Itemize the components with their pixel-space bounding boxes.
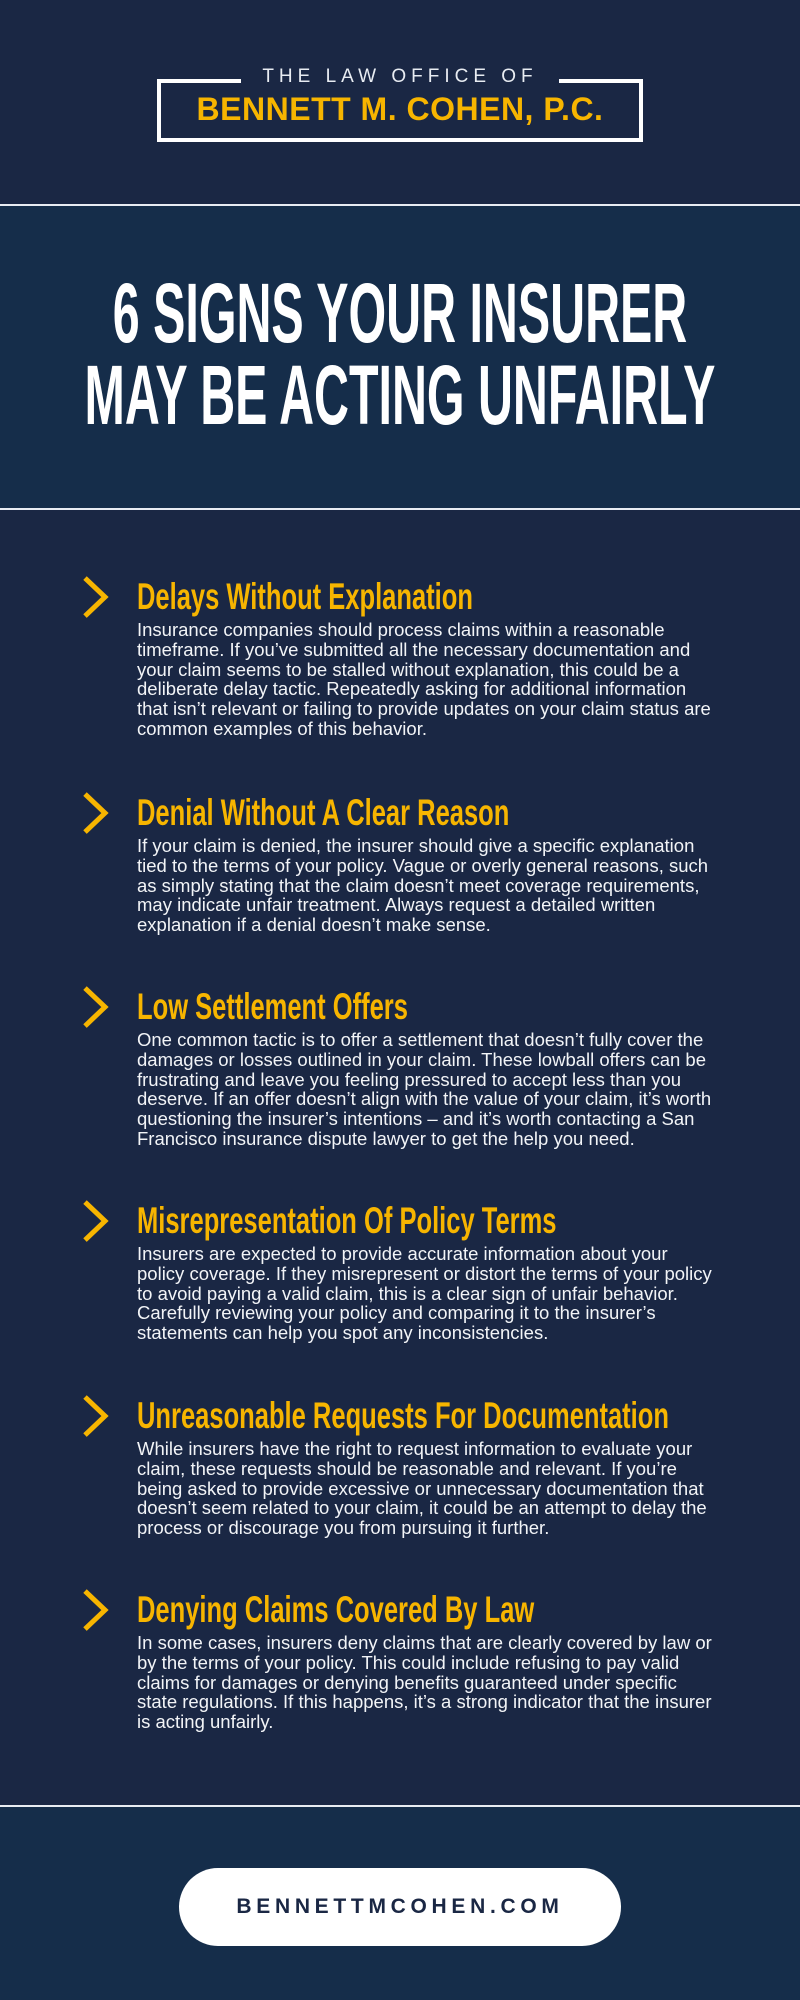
logo: BENNETT M. COHEN, P.C. [197, 91, 603, 127]
website button [179, 1868, 621, 1946]
text [137, 835, 708, 935]
text: damages or losses outlined in your claim. These lowball offers can be [137, 1049, 706, 1070]
text: Carefully reviewing your policy and comparing it to the insurer’s [137, 1302, 656, 1323]
icon: chevron [83, 986, 108, 1028]
item 6 [83, 1589, 712, 1732]
text: While insurers have the right to request information to evaluate your [137, 1438, 692, 1459]
item 5 [83, 1395, 707, 1538]
text: explanation if a denial doesn’t make sense. [137, 914, 491, 935]
text: Insurance companies should process claims within a reasonable [137, 619, 665, 640]
text: questioning the insurer’s intentions – and it’s worth contacting a San [137, 1108, 694, 1129]
text: deliberate delay tactic. Repeatedly asking for additional information [137, 678, 686, 699]
title panel [0, 206, 800, 508]
text: One common tactic is to offer a settlement that doesn’t fully cover the [137, 1029, 703, 1050]
text: claims for damages or denying benefits guaranteed under specific [137, 1672, 677, 1693]
text [137, 619, 711, 739]
item 3 [83, 986, 711, 1149]
text: may indicate unfair treatment. Always request a detailed written [137, 894, 655, 915]
text [137, 1438, 707, 1538]
text [137, 1243, 712, 1343]
item 4 [83, 1200, 712, 1343]
heading: Denial Without A Clear Reason [137, 792, 509, 833]
icon: chevron [83, 1589, 108, 1631]
text: being asked to provide excessive or unnecessary documentation that [137, 1478, 704, 1499]
text: tied to the terms of your policy. Vague or overly general reasons, such [137, 855, 708, 876]
text: process or discourage you from pursuing it further. [137, 1517, 549, 1538]
text: deserve. If an offer doesn’t align with the value of your claim, it’s worth [137, 1088, 711, 1109]
text: If your claim is denied, the insurer should give a specific explanation [137, 835, 694, 856]
text: to avoid paying a valid claim, this is a clear sign of unfair behavior. [137, 1283, 678, 1304]
text [137, 1632, 712, 1732]
text: is acting unfairly. [137, 1711, 273, 1732]
item 1 [83, 576, 711, 739]
item 2 [83, 792, 708, 935]
text: policy coverage. If they misrepresent or distort the terms of your policy [137, 1263, 712, 1284]
text: claim, these requests should be reasonable and relevant. If you’re [137, 1458, 677, 1479]
logo [157, 79, 643, 142]
heading: Unreasonable Requests For Documentation [137, 1395, 669, 1436]
text: statements can help you spot any inconsistencies. [137, 1322, 548, 1343]
header panel [0, 0, 800, 205]
heading: Misrepresentation Of Policy Terms [137, 1200, 556, 1241]
text: common examples of this behavior. [137, 718, 427, 739]
text: by the terms of your policy. This could include refusing to pay valid [137, 1652, 679, 1673]
text: as simply stating that the claim doesn’t meet coverage requirements, [137, 875, 699, 896]
website button: BENNETTMCOHEN.COM [236, 1895, 564, 1918]
header panel: THE LAW OFFICE OF [262, 66, 538, 87]
footer panel [0, 1807, 800, 2000]
text: In some cases, insurers deny claims that are clearly covered by law or [137, 1632, 712, 1653]
icon: chevron [83, 1395, 108, 1437]
icon: chevron [83, 1200, 108, 1242]
icon: chevron [83, 576, 108, 618]
text: Francisco insurance dispute lawyer to get the help you need. [137, 1128, 635, 1149]
heading: Low Settlement Offers [137, 986, 408, 1027]
title [85, 266, 715, 442]
icon: chevron [83, 792, 108, 834]
text: Insurers are expected to provide accurate information about your [137, 1243, 668, 1264]
title: MAY BE ACTING UNFAIRLY [85, 348, 715, 442]
heading: Denying Claims Covered By Law [137, 1589, 534, 1630]
text: timeframe. If you’ve submitted all the necessary documentation and [137, 639, 690, 660]
text: frustrating and leave you feeling pressured to accept less than you [137, 1069, 681, 1090]
text: your claim seems to be stalled without explanation, this could be a [137, 659, 679, 680]
heading: Delays Without Explanation [137, 576, 473, 617]
title: 6 SIGNS YOUR INSURER [113, 266, 687, 360]
text [137, 1029, 711, 1149]
text: state regulations. If this happens, it’s a strong indicator that the insurer [137, 1691, 712, 1712]
text: that isn’t relevant or failing to provide updates on your claim status are [137, 698, 711, 719]
text: doesn’t seem related to your claim, it could be an attempt to delay the [137, 1497, 707, 1518]
